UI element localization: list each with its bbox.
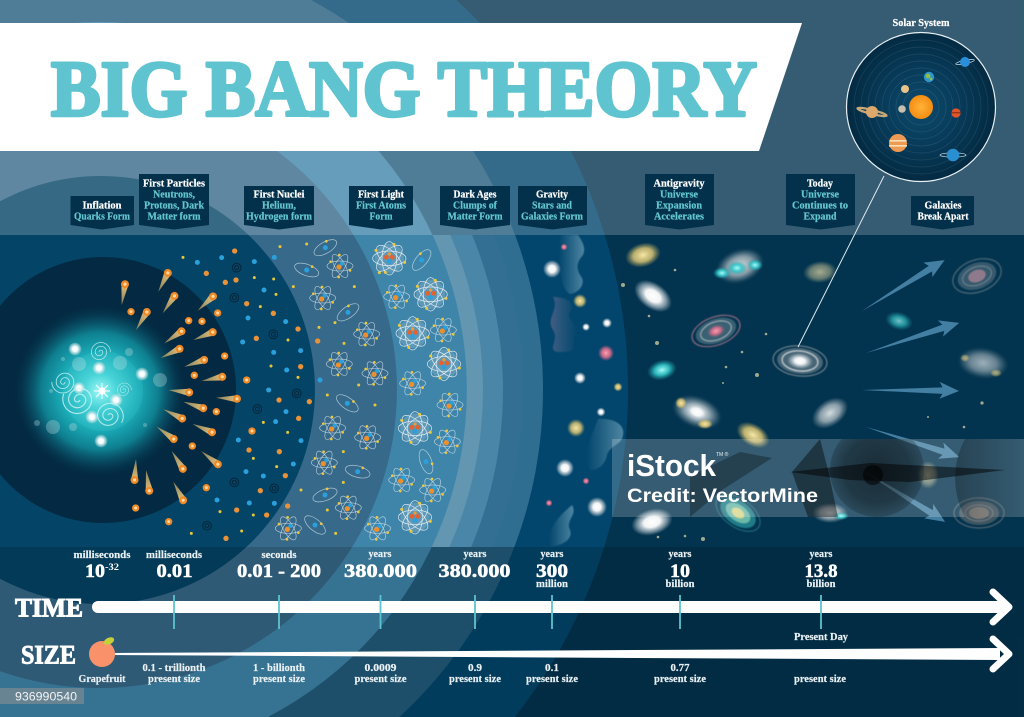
inset heading: Solar System [892,18,950,29]
label: galaxies break apart: Break Apart [918,212,969,222]
watermark [612,439,1024,517]
label: first particles: Neutrons, [153,190,195,200]
size values: 0.1 - trillionth [142,663,206,674]
time values: 300 [536,561,568,582]
label: first particles: First Particles [143,178,205,190]
neptune [940,149,966,161]
label: gravity: Gravity [536,190,569,200]
label: antigravity: Universe [660,190,698,200]
label: antigravity: Accelerates [654,212,704,222]
first particles: comets [118,268,241,506]
title banner [0,23,802,151]
label: first nuclei: First Nuclei [254,190,305,200]
label: today: Continues to [792,200,848,212]
label: gravity: Galaxies Form [521,212,583,222]
label: today [786,174,855,230]
label: gravity [518,186,587,230]
size values: present size [526,674,579,685]
time values: 13.8 [804,561,838,582]
watermark logo: iStock [627,448,717,483]
trademark: TM ® [716,451,729,458]
saturn [857,106,887,118]
label: first light [349,186,413,230]
watermark shapes [690,439,1006,517]
small stars [621,269,984,541]
mercury [898,105,906,113]
first particles and nuclei: dots [127,242,381,541]
centre star [94,383,110,399]
size values: present size [654,674,707,685]
faint bubbles [34,348,167,434]
size values: present size [794,674,847,685]
bright bubbles [68,342,148,448]
label: today: Today [807,178,834,190]
pink spiral galaxy [688,309,744,353]
size values: 0.1 [545,663,559,674]
label: antigravity: Expansion [656,200,702,212]
time values: milliseconds [74,550,131,561]
label: gravity: Stars and [532,200,572,212]
size values: present size [354,674,407,685]
label: first nuclei [244,186,314,230]
size axis [21,636,1009,685]
label: first particles [139,174,209,230]
size values: 0.0009 [364,663,396,674]
jupiter [889,134,907,152]
icon: grapefruit [89,636,115,667]
size values: 1 - billionth [253,663,305,674]
stage labels [70,174,974,230]
label: today: Expand [804,212,837,222]
label: antigravity [645,174,714,230]
label: first light: First Light [358,190,404,200]
size values [78,663,847,685]
size values: present size [253,674,306,685]
time values: -32 [105,562,120,572]
label: first nuclei: Helium, [262,200,296,212]
earth [924,72,934,82]
uranus [955,57,975,67]
sun [909,95,933,119]
expansion arrows [857,253,962,529]
time arrow [98,592,1009,622]
label: galaxies break apart: Galaxies [924,200,962,212]
time values: 380.000 [344,561,417,582]
time heading: TIME [15,594,83,622]
label: inflation: Inflation [82,200,122,212]
solar system inset [798,18,996,347]
inflation glow [14,305,186,477]
time values: 10 [85,561,105,582]
time values: milliseconds [146,550,202,561]
time values: years [810,549,833,560]
size values: Grapefruit [78,674,126,685]
title: BIG BANG THEORY [51,46,757,134]
size values: 0.77 [670,663,690,674]
pointer line [798,176,884,347]
label: first nuclei: Hydrogen form [246,212,312,222]
time values: billion [666,579,695,590]
time values: years [368,549,392,560]
time ticks [174,595,821,629]
spirals [52,342,131,432]
time values: 0.01 [156,561,192,582]
size values: present size [449,674,502,685]
time values: 10 [670,561,690,582]
label: dark ages: Matter Form [448,212,503,222]
label: dark ages: Clumps of [453,200,497,212]
venus [901,85,909,93]
time values: million [536,579,568,590]
label: today: Universe [801,190,839,200]
size arrow [112,639,1009,669]
inset disc [846,32,996,182]
antigravity and today: galaxies [621,239,984,541]
label: first particles: Matter form [148,212,201,222]
label: first particles: Protons, Dark [144,200,204,212]
label: first light: Form [370,212,393,222]
time values: 0.01 - 200 [237,561,321,582]
label: antigravity: Antigravity [654,178,705,190]
size values: 0.9 [468,663,482,674]
image id tag [0,688,84,704]
today spiral galaxy [772,343,828,379]
time values: seconds [262,550,297,561]
label: inflation: Quarks Form [74,212,130,222]
size heading: SIZE [21,640,76,670]
time values: Present Day [794,632,848,643]
time values: 380.000 [438,561,510,582]
label: first light: First Atoms [356,200,406,212]
time values [74,549,848,643]
image id tag: 936990540 [15,692,77,704]
time values: years [668,549,692,560]
watermark credit: Credit: VectorMine [627,486,818,507]
time values: billion [806,579,836,590]
label: galaxies break apart [911,196,974,230]
galaxies break apart [857,252,1010,529]
time axis [15,549,1009,643]
time values: years [540,549,564,560]
label: inflation [70,196,134,230]
label: dark ages [440,186,510,230]
time values: years [464,549,487,560]
mars [951,108,961,118]
gravity: stars and nebulae [543,235,623,547]
first nuclei and first light: atoms [275,236,463,542]
size values: present size [148,674,201,685]
label: dark ages: Dark Ages [454,190,496,200]
